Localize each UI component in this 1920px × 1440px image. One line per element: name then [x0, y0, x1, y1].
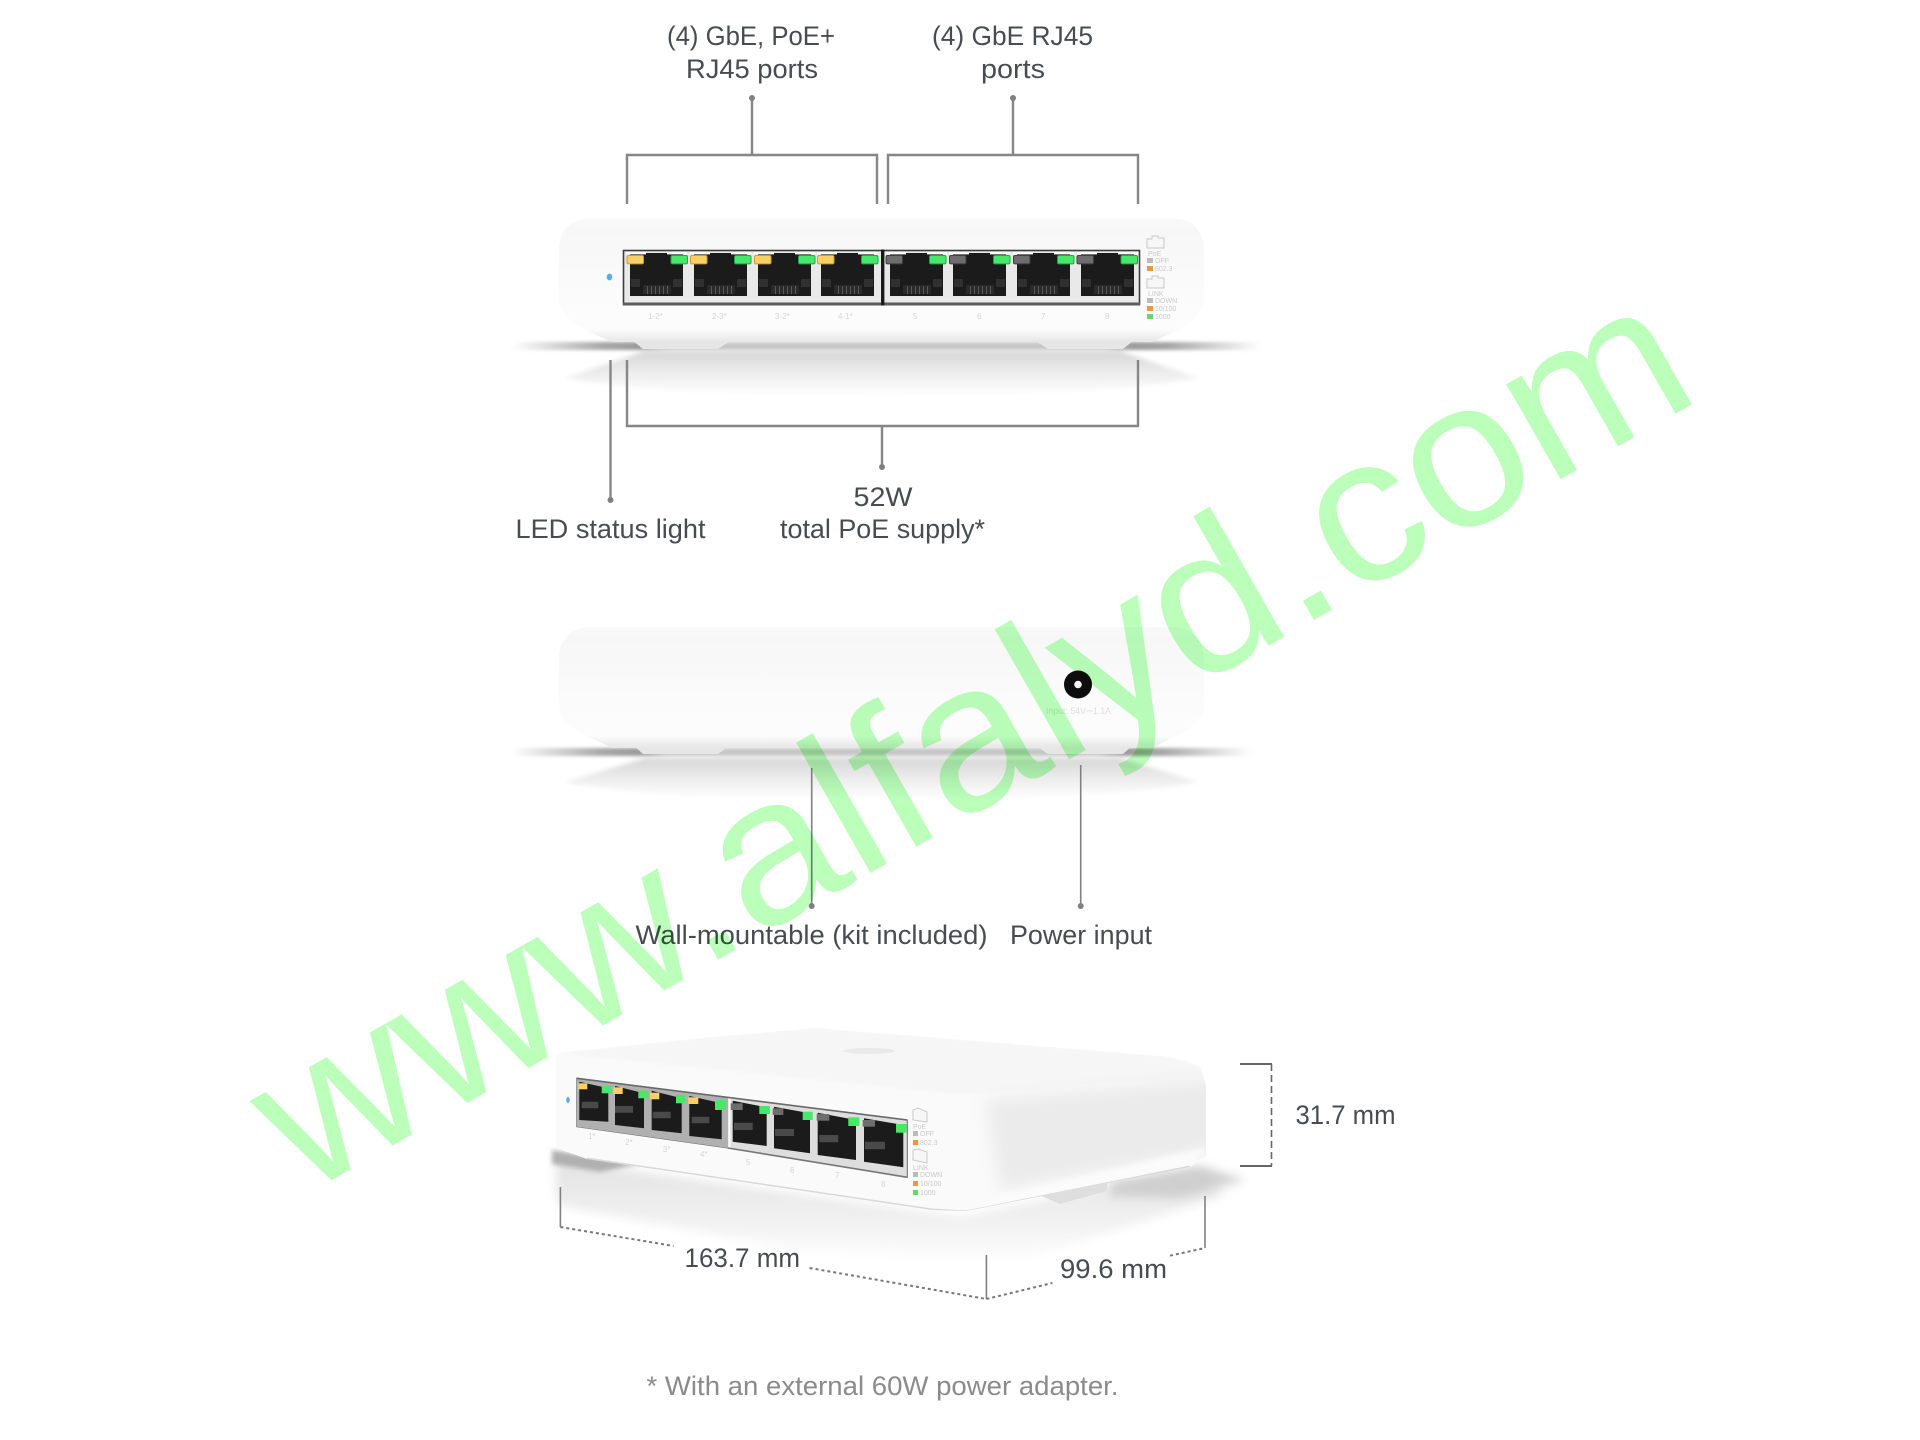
chassis: front view [559, 218, 1204, 342]
top surface [556, 1028, 1206, 1094]
port numbers: angled: 2* [625, 1138, 633, 1147]
port legend: angled: DOWN [920, 1172, 942, 1179]
callout line: LED status light [608, 360, 614, 503]
port legend: front view: DOWN [1155, 298, 1177, 305]
port legend: front view: 802.3 [1155, 266, 1173, 273]
logo on top [843, 1048, 895, 1054]
power rating text: Input: 54V⎓1.1A [1046, 706, 1111, 716]
port block: front view [623, 250, 1140, 306]
label: wall-mountable: Wall-mountable (kit included) [636, 920, 988, 950]
heading: PoE ports label: (4) GbE, PoE+ [667, 21, 835, 51]
label: power input: Power input [1010, 920, 1152, 950]
floor shadow: angled right [1110, 1166, 1245, 1198]
label: total PoE supply: total PoE supply* [780, 514, 985, 544]
port numbers: angled: 3* [663, 1145, 671, 1154]
dimension: depth [986, 1196, 1205, 1299]
device: rear view [512, 627, 1252, 800]
floor shadow: rear view [512, 748, 1252, 756]
icon: power jack [1064, 670, 1092, 698]
port legend: front view: 10/100 [1155, 306, 1177, 313]
port legend: front view: PoE [1148, 251, 1162, 258]
dimension: height [1240, 1064, 1272, 1166]
port numbers: angled: 8 [881, 1180, 886, 1189]
label: depth: 99.6 mm [1060, 1254, 1167, 1284]
foot: angled view [1041, 1181, 1107, 1204]
floor shadow: front view [512, 342, 1260, 350]
reflection: rear view [565, 758, 1198, 800]
heading: GbE ports label: ports [981, 54, 1045, 84]
right side [989, 1081, 1206, 1186]
status LED [607, 274, 612, 280]
heading: PoE ports label: RJ45 ports [686, 54, 818, 84]
label: height: 31.7 mm [1296, 1100, 1396, 1130]
reflection: angled view [556, 1160, 1225, 1264]
device: front view [512, 218, 1260, 396]
port numbers: front view: 3-2* [775, 312, 790, 321]
port legend: angled: PoE [913, 1124, 927, 1131]
status LED: angled [566, 1097, 570, 1103]
port numbers: front view: 8 [1105, 312, 1110, 321]
label: width: 163.7 mm [684, 1243, 800, 1273]
floor shadow: angled left [552, 1150, 640, 1172]
device: angled view [549, 1030, 1242, 1240]
port numbers: front view: 4-1* [838, 312, 853, 321]
heading: PoE ports label [667, 21, 835, 84]
port numbers: front view: 2-3* [712, 312, 727, 321]
bracket: PoE ports [627, 95, 877, 204]
port numbers: angled: 5 [746, 1158, 751, 1167]
port legend: angled: 802.3 [920, 1140, 938, 1147]
dimension: width [560, 1187, 986, 1299]
port numbers: front view: 7 [1041, 312, 1046, 321]
chassis: angled view [560, 1030, 1206, 1211]
heading: GbE ports label: (4) GbE RJ45 [932, 21, 1093, 51]
port block: angled [577, 1078, 907, 1177]
port numbers: front view: 5 [913, 312, 918, 321]
heading: GbE ports label [932, 21, 1093, 84]
port legend: angled: OFF [920, 1131, 934, 1138]
port legend: angled: LINK [913, 1165, 929, 1172]
port numbers: angled: 7 [835, 1171, 840, 1180]
port numbers: angled [588, 1132, 886, 1189]
footnote: * With an external 60W power adapter. [646, 1371, 1118, 1401]
bracket: GbE ports [888, 95, 1138, 204]
bottom edge [587, 1159, 1190, 1212]
port numbers: front view: 6 [977, 312, 982, 321]
bracket: total PoE supply [627, 360, 1138, 470]
port legend: angled [913, 1108, 942, 1197]
feet: front view [632, 340, 1134, 349]
port numbers: angled: 4* [700, 1150, 708, 1159]
port legend: front view: 1000 [1155, 314, 1171, 321]
port legend: front view: OFF [1155, 258, 1169, 265]
feet: rear view [632, 744, 1134, 754]
chassis: rear view [559, 627, 1204, 748]
port legend: angled: 1000 [920, 1190, 936, 1197]
port numbers: front view: 1-2* [648, 312, 663, 321]
bottom bright band [966, 1148, 1206, 1211]
port numbers: angled: 1* [588, 1132, 596, 1141]
port legend: front view: LINK [1148, 291, 1164, 298]
reflection: front view [565, 351, 1198, 396]
port numbers: front view [648, 312, 1110, 321]
port legend: front view [1147, 236, 1177, 321]
port legend: angled: 10/100 [920, 1181, 942, 1188]
label: total PoE supply: 52W [854, 482, 913, 512]
watermark: www.alfalyd.com [210, 235, 1726, 1235]
callout line: power input [1078, 765, 1084, 909]
label: LED status light: LED status light [516, 514, 706, 544]
label: total PoE supply [780, 482, 985, 544]
port numbers: angled: 6 [790, 1166, 795, 1175]
callout line: wall-mountable [809, 768, 815, 909]
